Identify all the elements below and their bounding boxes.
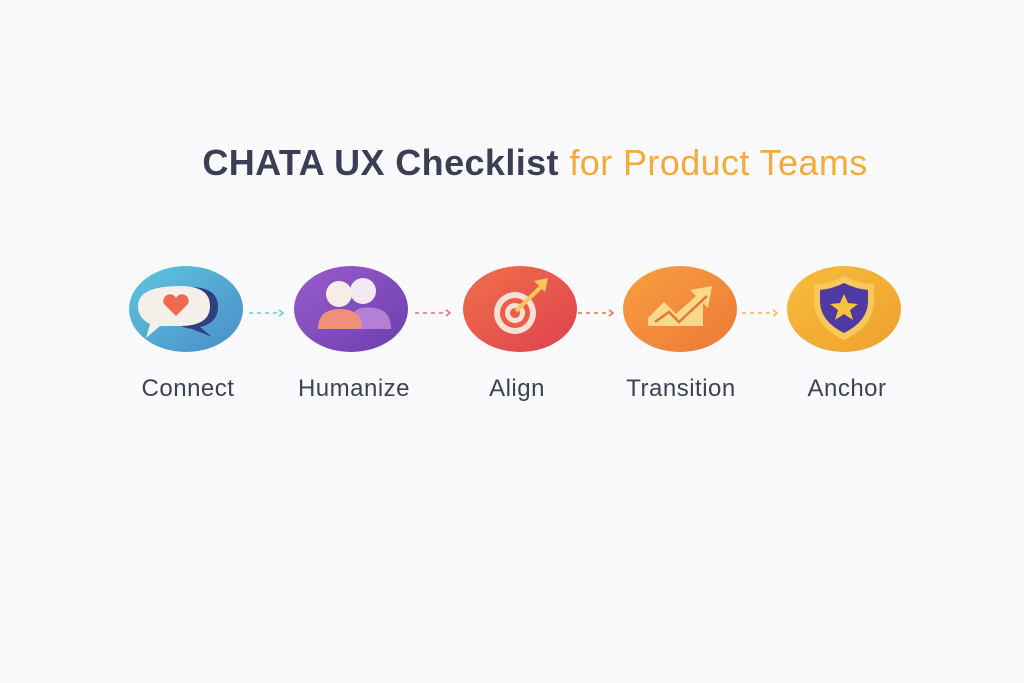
icon: align (463, 266, 577, 352)
label: Transition: Transition (626, 375, 736, 402)
label: Humanize: Humanize (298, 375, 410, 402)
icon: transition (623, 266, 737, 352)
arrow 1 (249, 310, 283, 316)
arrow 3 (578, 310, 613, 316)
icon: anchor (787, 266, 901, 352)
label: Connect: Connect (142, 375, 234, 402)
icon: connect (129, 266, 243, 352)
title: CHATA UX Checklist for Product Teams (202, 142, 868, 183)
arrow 4 (742, 310, 777, 316)
icon: humanize (294, 266, 408, 352)
arrow 2 (415, 310, 450, 316)
label: Align: Align (489, 375, 545, 402)
label: Anchor: Anchor (807, 375, 887, 402)
